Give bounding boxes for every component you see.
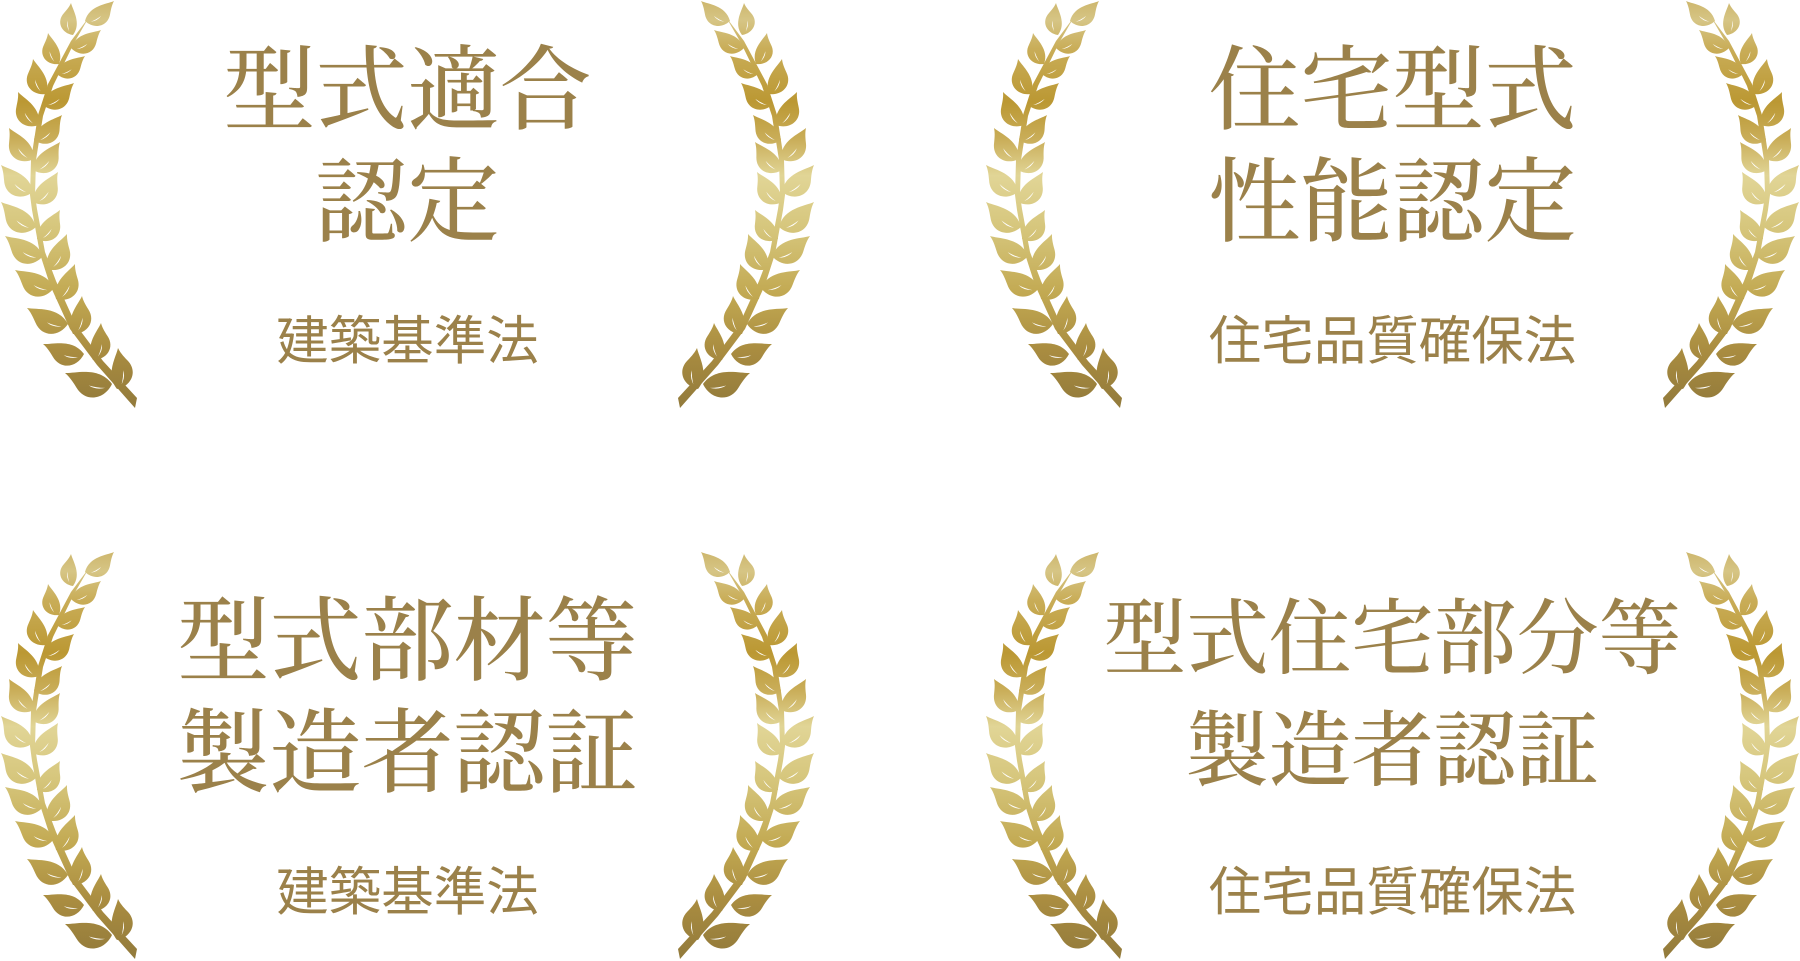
panel: 住宅型式性能認定 xyxy=(986,1,1799,408)
law name: 住宅品質確保法 xyxy=(1209,312,1576,371)
panel: 型式適合認定 xyxy=(1,1,814,408)
heading line 1: 型式住宅部分等 xyxy=(1104,593,1681,685)
law name: 建築基準法 xyxy=(276,863,539,922)
heading line 2: 製造者認証 xyxy=(1186,705,1599,797)
heading line 2: 性能認定 xyxy=(1208,152,1576,254)
icon: laurel wreath xyxy=(986,552,1799,959)
heading line 1: 型式適合 xyxy=(223,40,592,142)
heading line 1: 住宅型式 xyxy=(1208,40,1576,142)
law name: 建築基準法 xyxy=(276,312,539,371)
icon: laurel wreath xyxy=(1,1,814,408)
panel: 型式部材等製造者認証 xyxy=(1,552,814,959)
panel: 型式住宅部分等製造者認証 xyxy=(986,552,1799,959)
icon: laurel wreath xyxy=(1,552,814,959)
heading line 1: 型式部材等 xyxy=(177,591,638,693)
law name: 住宅品質確保法 xyxy=(1209,863,1576,922)
heading line 2: 製造者認証 xyxy=(177,703,638,805)
heading line 2: 認定 xyxy=(315,152,500,254)
icon: laurel wreath xyxy=(986,1,1799,408)
